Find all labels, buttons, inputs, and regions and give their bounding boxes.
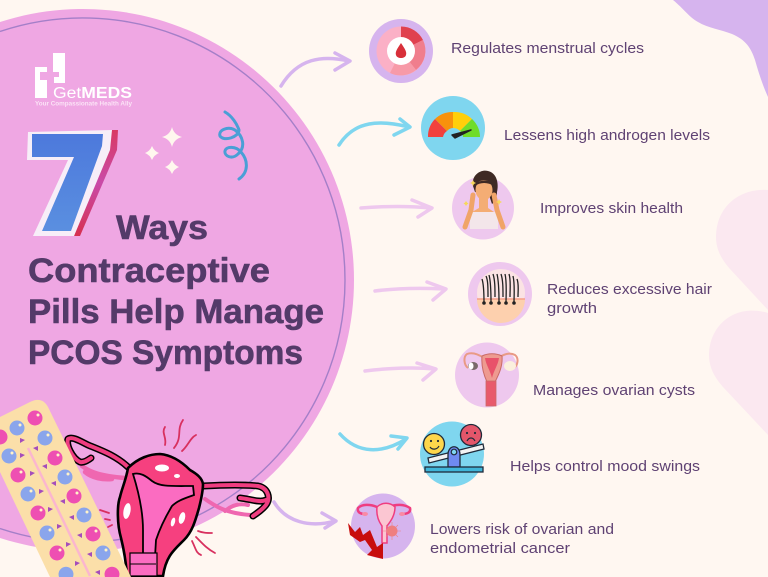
title: Contraceptive	[28, 252, 270, 290]
squiggles above and beside uterus	[100, 420, 215, 555]
text: cancer: Lowers risk of ovarian and	[430, 521, 614, 538]
cervix	[130, 553, 157, 576]
icon: ovarian cysts	[455, 342, 519, 408]
arrow 7	[274, 502, 336, 528]
logo: GetMEDS: GetMEDS	[53, 85, 132, 102]
arrow 2	[339, 119, 410, 145]
text: cysts: Manages ovarian cysts	[533, 382, 695, 399]
illustration: pill pack	[0, 400, 131, 577]
icon: blue squiggle	[220, 112, 246, 179]
illustration: uterus	[68, 420, 268, 576]
text: cancer	[430, 521, 614, 557]
pink pills	[0, 410, 120, 577]
uterus body	[118, 454, 203, 576]
text: androgen: Lessens high androgen levels	[504, 127, 710, 144]
number seven	[27, 130, 118, 236]
arrow 1	[281, 53, 350, 86]
blue pills	[2, 420, 110, 577]
pack triangles	[20, 438, 100, 575]
title: Ways	[116, 209, 208, 247]
tubes	[68, 438, 128, 467]
icon: menstrual cycle	[369, 19, 433, 83]
arrow 6	[340, 434, 407, 450]
icon: gauge	[421, 96, 485, 160]
arrow 5	[365, 363, 436, 380]
text: menstrual cycles: Regulates menstrual cycles	[451, 40, 644, 57]
background shape: pink heart upper	[716, 190, 768, 310]
circle inner outline	[0, 18, 345, 542]
text: cancer: endometrial cancer	[430, 540, 570, 557]
icon: woman skin	[452, 171, 514, 240]
icon: sparkles	[145, 127, 182, 174]
title	[28, 209, 324, 372]
text: hair: Reduces excessive hair	[547, 281, 712, 298]
uterine cavity	[133, 473, 194, 557]
text: hair: growth	[547, 300, 597, 317]
icon: mood scale	[420, 422, 484, 486]
arrow 4	[375, 282, 446, 300]
text: mood: Helps control mood swings	[510, 458, 700, 475]
pack stripe	[28, 448, 90, 576]
pill shine	[10, 414, 108, 552]
logo: GetMEDS	[35, 53, 133, 108]
panel: large pink circle	[0, 9, 354, 551]
background blob: top right purple	[673, 0, 768, 97]
text: hair	[547, 281, 712, 317]
icon: hair growth	[468, 262, 532, 326]
arrow 3	[361, 200, 432, 217]
background shape: pink heart lower	[709, 311, 768, 435]
highlights	[155, 464, 169, 472]
text: skin: Improves skin health	[540, 200, 683, 217]
title: PCOS Symptoms	[28, 334, 303, 372]
ovary frills	[82, 466, 125, 479]
logo: GetMEDS: Your Compassionate Health Ally	[35, 102, 133, 108]
title: Pills Help Manage	[28, 293, 324, 331]
icon: cancer risk	[348, 494, 415, 559]
